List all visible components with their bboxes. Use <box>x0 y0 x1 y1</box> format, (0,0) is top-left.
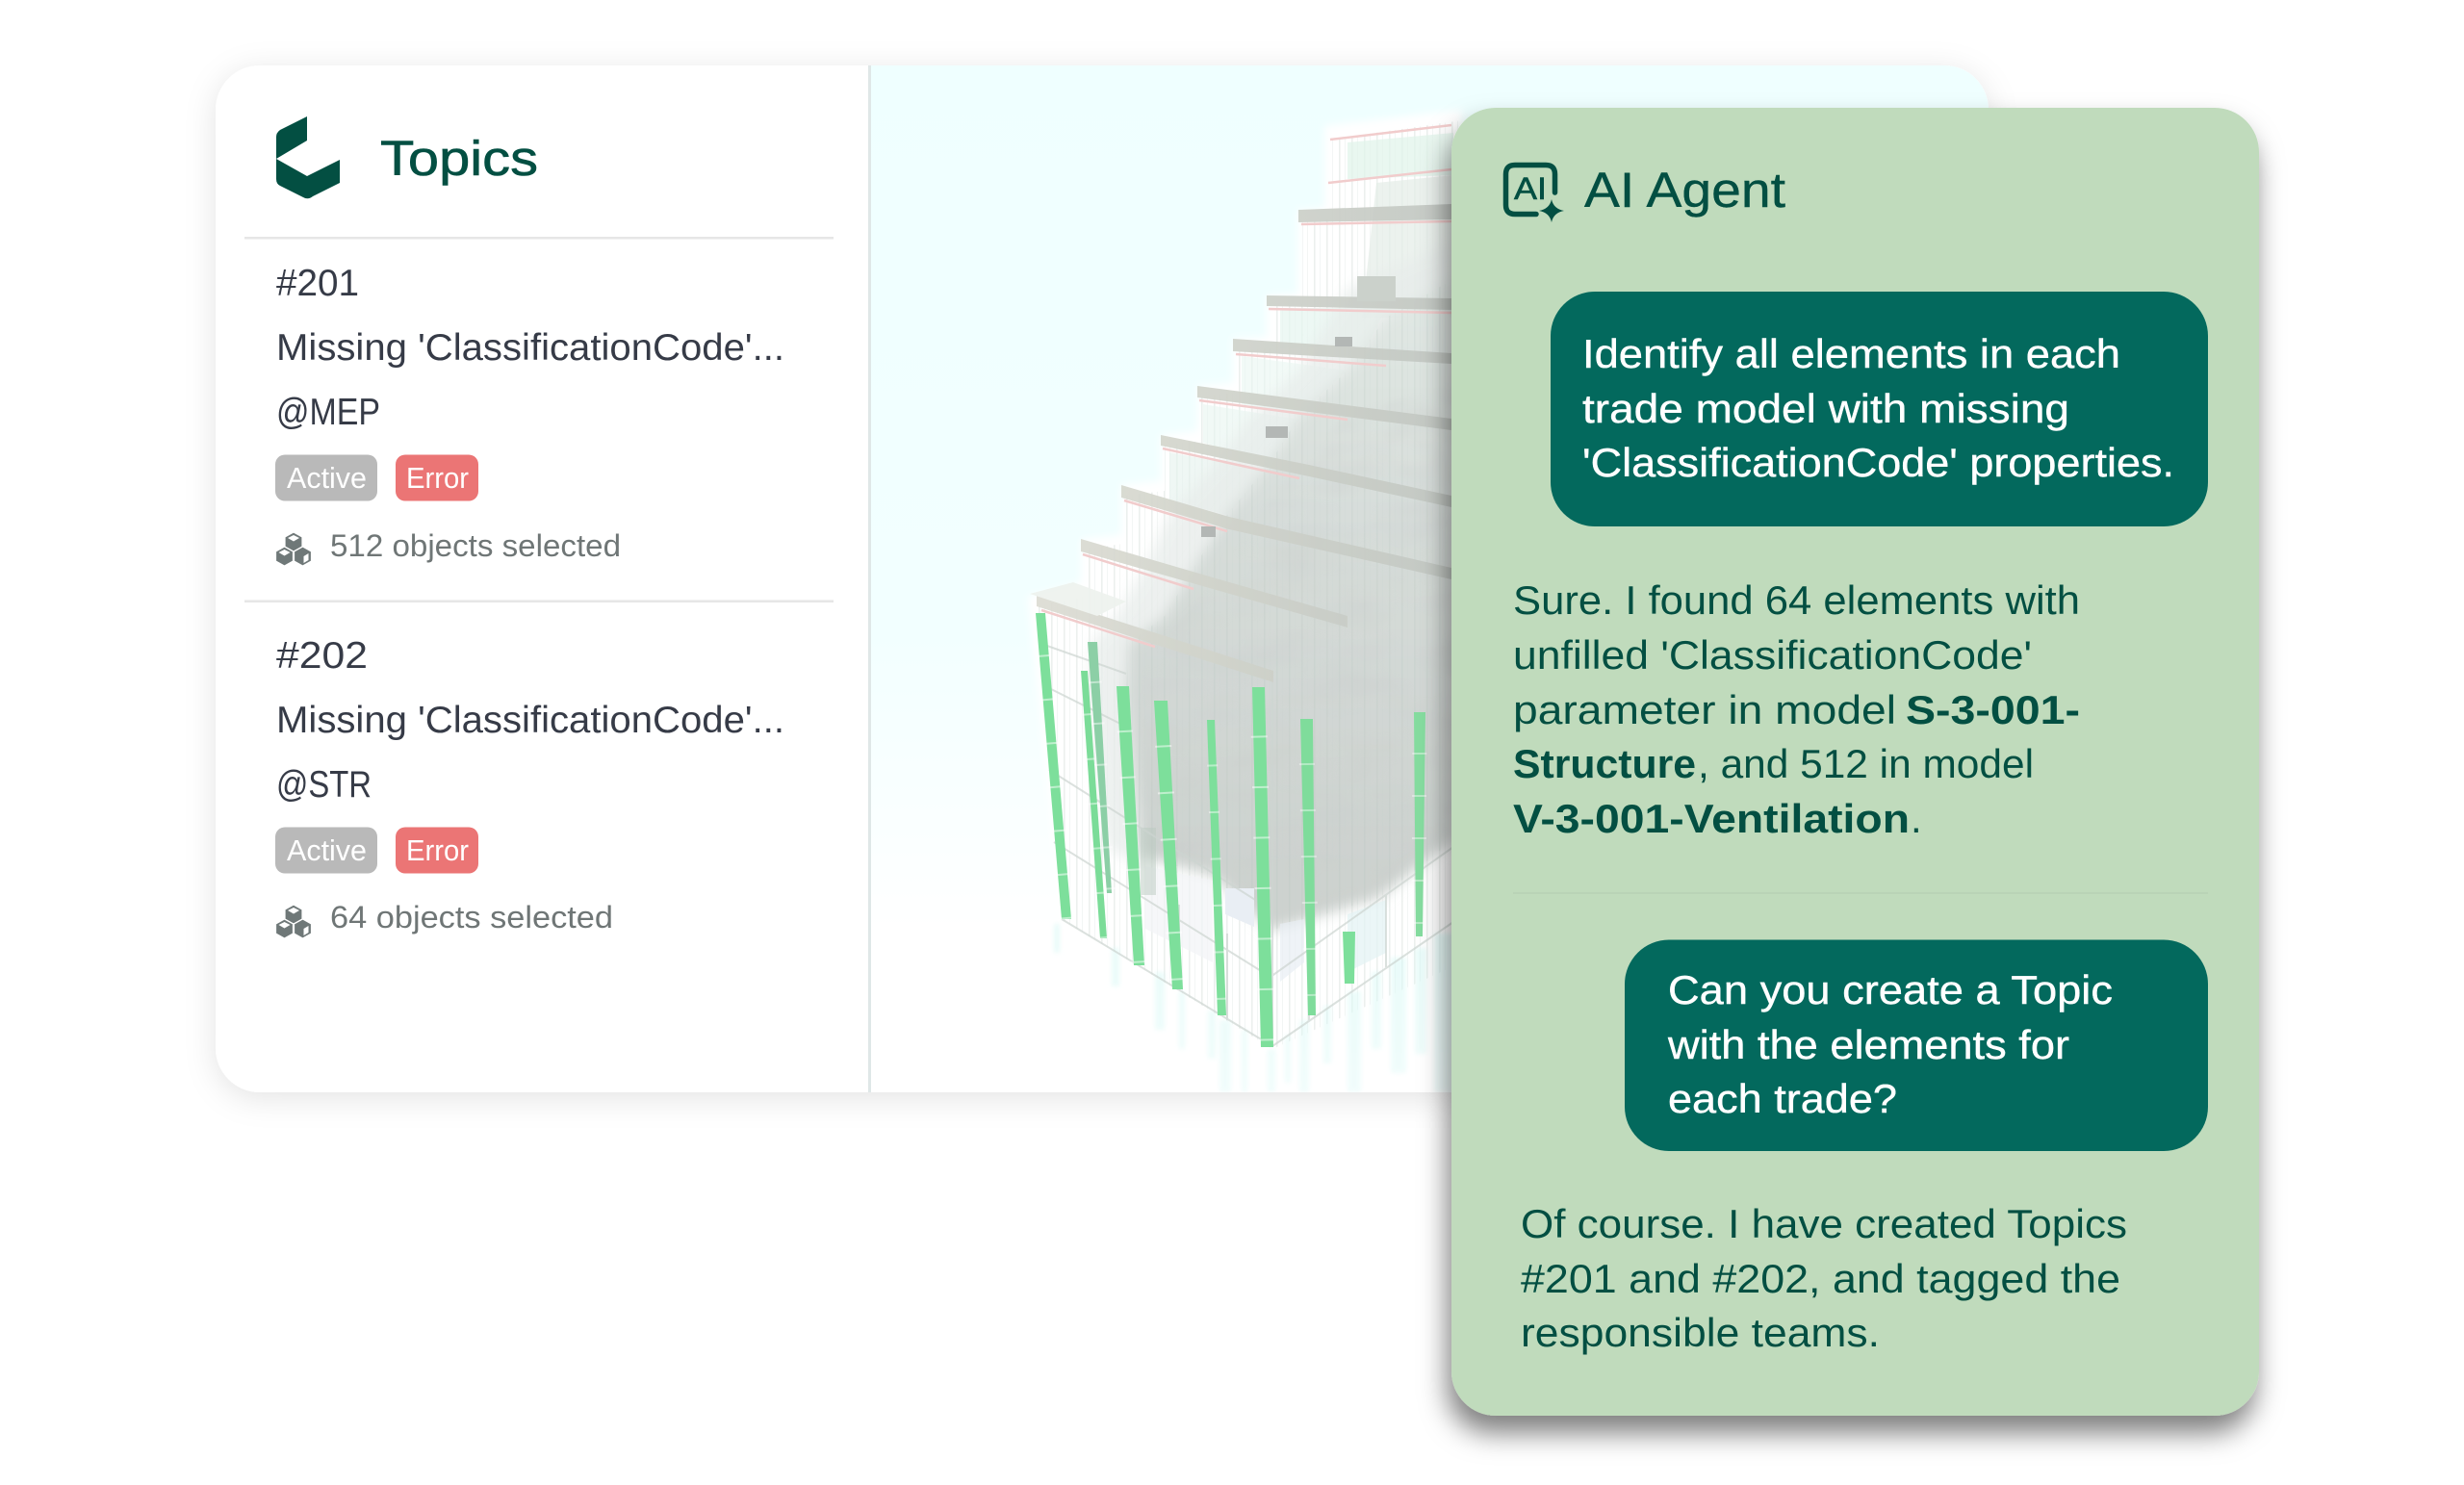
icon: cubes <box>275 532 312 566</box>
badge: Error: Error <box>406 833 469 867</box>
user message 2: each trade? <box>1668 1076 1897 1121</box>
badge: Active <box>275 828 377 874</box>
user message 2 <box>1625 939 2208 1151</box>
logo <box>276 116 340 198</box>
panel: Topics window <box>216 65 1989 1092</box>
panel: AI Agent chat <box>1451 108 2259 1416</box>
user message 2: Can you create a Topic <box>1668 967 2113 1012</box>
topic card 201: @MEP <box>276 392 380 433</box>
badge: Active: Active <box>287 833 367 867</box>
topic card 201: Missing 'ClassificationCode'... <box>276 327 784 369</box>
3D building model viewport <box>871 65 1989 1092</box>
badge: Error <box>396 454 478 500</box>
assistant reply 1: . <box>1911 796 1922 841</box>
badge: Active: Active <box>287 461 367 495</box>
assistant reply 1: V-3-001-Ventilation <box>1513 796 1910 841</box>
icon: cubes <box>275 905 312 938</box>
icon: AI sparkle <box>1505 166 1564 222</box>
assistant reply 1: Structure <box>1513 741 1696 786</box>
pale band at the edge of the gray mass <box>1088 284 1388 858</box>
user message 1: 'ClassificationCode' properties. <box>1582 440 2174 485</box>
heading: Topics: Topics <box>380 131 538 186</box>
badge: Error <box>396 828 478 874</box>
green highlighted columns <box>1036 613 1425 1047</box>
topic card 202: 64 objects selected <box>330 900 613 935</box>
user message 2: with the elements for <box>1667 1022 2069 1067</box>
assistant reply 2: responsible teams. <box>1521 1310 1880 1355</box>
icon: AI sparkle: AI <box>1514 171 1547 206</box>
topic card 202: #202 <box>276 635 368 677</box>
badge: Active <box>275 454 377 500</box>
assistant reply 1: parameter in model <box>1513 687 1896 732</box>
topic card 202 <box>275 635 784 938</box>
heading: AI Agent: AI Agent <box>1584 163 1785 218</box>
user message 1: Identify all elements in each <box>1582 331 2120 376</box>
topic card 201 <box>275 263 784 566</box>
user message 1: trade model with missing <box>1582 386 2069 431</box>
sidebar divider <box>868 65 871 1092</box>
assistant reply 1: unfilled 'ClassificationCode' <box>1513 632 2032 678</box>
topic card 202: @STR <box>276 764 372 806</box>
assistant reply 1: , and 512 in model <box>1698 741 2034 786</box>
topic card 201: #201 <box>276 263 359 304</box>
assistant reply 1: Sure. I found 64 elements with <box>1513 577 2080 623</box>
user message 1 <box>1551 292 2208 526</box>
assistant reply 1: S-3-001- <box>1906 687 2080 732</box>
assistant reply 2 <box>1521 1201 2127 1355</box>
assistant reply 1 <box>1513 577 2080 841</box>
assistant reply 2: Of course. I have created Topics <box>1521 1201 2127 1246</box>
assistant reply 2: #201 and #202, and tagged the <box>1521 1256 2120 1301</box>
topic card 201: 512 objects selected <box>330 528 621 563</box>
topic card 202: Missing 'ClassificationCode'... <box>276 700 784 741</box>
badge: Error: Error <box>406 461 469 495</box>
